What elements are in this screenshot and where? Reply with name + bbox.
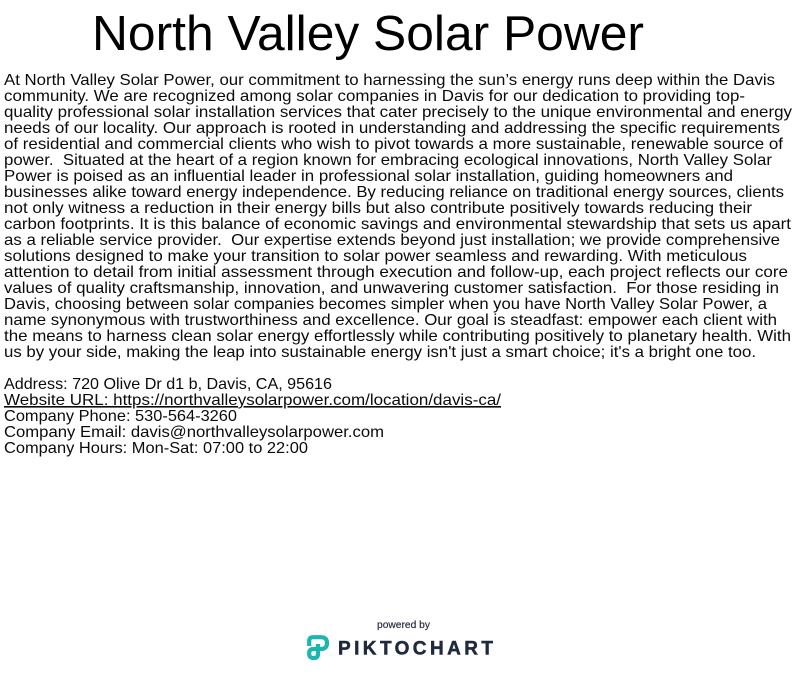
website link: Website URL: https://northvalleysolarpower.com/location/davis-ca/: [4, 392, 502, 409]
description text block: us by your side, making the leap into sustainable energy isn't just a smart choice; it's a bright one too.: [4, 344, 756, 361]
description text block: of residential and commercial clients who wish to pivot towards a more sustainable, renewable source of: [4, 136, 784, 153]
description text block: the means to harness clean solar energy effortlessly while contributing positively to planetary health. With: [4, 328, 791, 345]
description text block: needs of our locality. Our approach is rooted in understanding and addressing the specific requirements: [4, 120, 780, 137]
description text block: not only witness a reduction in their energy bills but also contribute positively towards reducing their: [4, 200, 753, 217]
description text block: businesses alike toward energy independence. By reducing reliance on traditional energy sources, clients: [4, 184, 784, 201]
description text block: values of quality craftsmanship, innovation, and unwavering customer satisfaction. For those residing in: [4, 280, 779, 297]
description text block: Davis, choosing between solar companies becomes simpler when you have North Valley Solar Power, a: [4, 296, 767, 313]
powered by label: powered by: [377, 619, 431, 631]
description text block: as a reliable service provider. Our expertise extends beyond just installation; we provide comprehensive: [4, 232, 780, 249]
description text block: [4, 72, 792, 361]
description text block: solutions designed to make your transition to solar power seamless and rewarding. With meticulous: [4, 248, 747, 265]
piktochart wordmark: PIKTOCHART: [338, 638, 493, 659]
description text block: attention to detail from initial assessment through execution and follow-up, each project reflects our core: [4, 264, 788, 281]
title: North Valley Solar Power: [92, 7, 644, 61]
description text block: name synonymous with trustworthiness and excellence. Our goal is steadfast: empower each client with: [4, 312, 777, 329]
description text block: power. Situated at the heart of a region known for embracing ecological innovations, North Valley Solar: [4, 152, 773, 169]
icon: piktochart logo: [309, 637, 327, 658]
description text block: carbon footprints. It is this balance of economic savings and environmental stewardship that sets us apart: [4, 216, 792, 233]
description text block: quality professional solar installation services that cater precisely to the unique environmental and energy: [4, 104, 792, 121]
description text block: At North Valley Solar Power, our commitment to harnessing the sun’s energy runs deep within the Davis: [4, 72, 775, 89]
contact details: [4, 376, 502, 457]
hours: Company Hours: Mon-Sat: 07:00 to 22:00: [4, 440, 308, 457]
description text block: Power is poised as an influential leader in professional solar installation, guiding homeowners and: [4, 168, 733, 185]
phone: Company Phone: 530-564-3260: [4, 408, 237, 425]
email: Company Email: davis@northvalleysolarpower.com: [4, 424, 384, 441]
address: Address: 720 Olive Dr d1 b, Davis, CA, 95616: [4, 376, 332, 393]
description text block: community. We are recognized among solar companies in Davis for our dedication to providing top-: [4, 88, 745, 105]
powered by piktochart badge: [309, 619, 493, 659]
